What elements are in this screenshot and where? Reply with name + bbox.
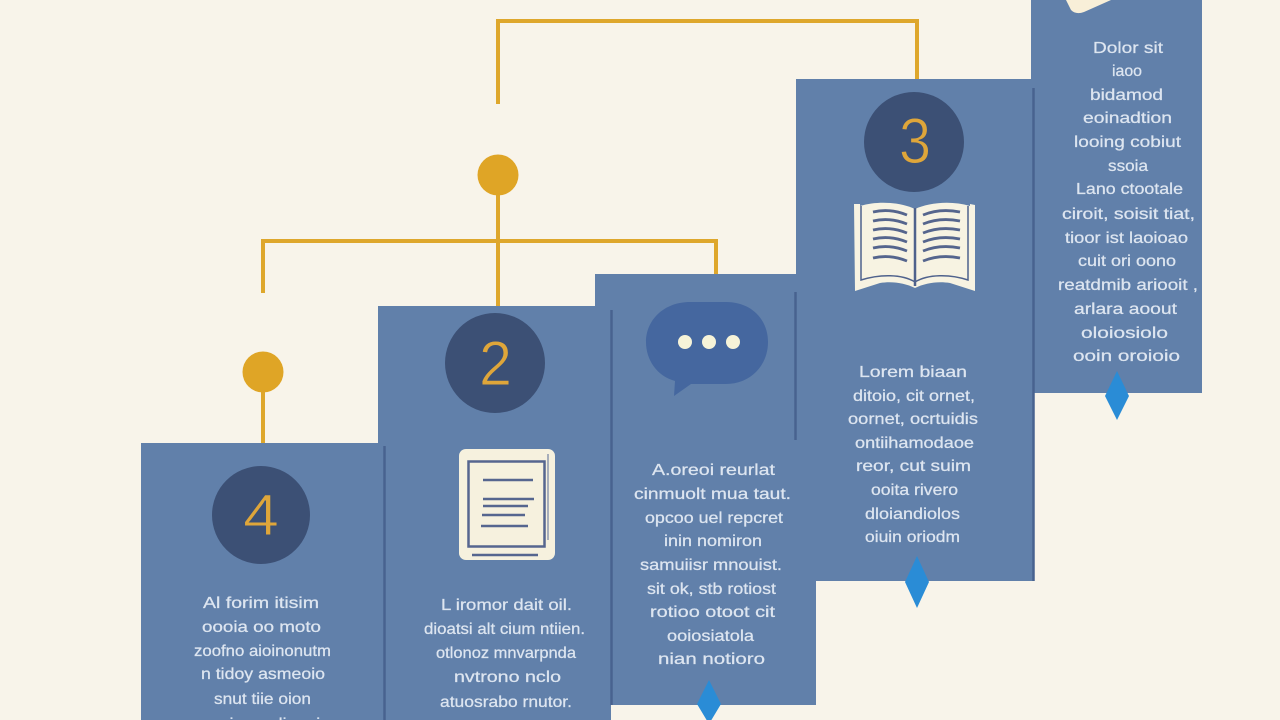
text: step 3 body: dloiandiolos (865, 506, 960, 523)
connector: node above step 4 (242, 352, 284, 443)
text: top right step body: ssoia (1108, 158, 1148, 175)
text: chat step body: rotioo otoot cit (650, 604, 776, 621)
text: top right step body: arlara aoout (1074, 301, 1178, 318)
text: step 3 body: ditoio, cit ornet, (853, 388, 975, 405)
text: chat step body: samuiisr mnouist. (640, 557, 782, 574)
text: top right step body: iaoo (1112, 63, 1142, 80)
text: chat step body: A.oreoi reurlat (652, 462, 776, 479)
badge: number 3: 3 (899, 105, 931, 177)
badge: number 3 (864, 92, 964, 192)
text: chat step body: nian notioro (658, 651, 765, 668)
text: chat step body: sit ok, stb rotiost (647, 581, 777, 598)
icon: open book (854, 203, 975, 291)
text: top right step body: oloiosiolo (1081, 325, 1168, 342)
text: top right step body: cuit ori oono (1078, 253, 1176, 270)
text: step 2 body: nvtrono nclo (454, 669, 561, 686)
text: top right step body: eoinadtion (1083, 110, 1172, 127)
icon: speech bubble (646, 302, 768, 396)
text: step 2 body: otlonoz mnvarpnda (436, 645, 576, 662)
text: step 2 body: L iromor dait oil. (441, 597, 572, 614)
text: chat step body: opcoo uel repcret (645, 510, 784, 527)
badge: number 2 (445, 313, 545, 413)
icon: diamond under chat step (697, 680, 721, 720)
text: chat step body (634, 462, 791, 668)
text: step 2 body: atuosrabo rnutor. (440, 694, 572, 711)
text: step 3 body: oiuin oriodm (865, 529, 960, 546)
badge: number 4: 4 (243, 483, 279, 548)
text: step 4 body: oooia oo moto (202, 619, 321, 636)
icon: document (459, 449, 555, 560)
text: step 3 body: ontiihamodaoe (855, 435, 974, 452)
icon: diamond under top right step (1105, 371, 1129, 420)
badge: number 4 (212, 466, 310, 564)
panel: step 3 (796, 79, 1034, 581)
text: top right step body: reatdmib ariooit , (1058, 277, 1198, 294)
text: top right step body: tioor ist laoioao (1065, 230, 1188, 247)
text: top right step body: Lano ctootale (1076, 181, 1183, 198)
text: step 4 body: snut tiie oion (214, 691, 311, 708)
text: step 4 body: n tidoy asmeoio (201, 666, 325, 683)
text: chat step body: inin nomiron (664, 533, 762, 550)
text: top right step body: Dolor sit (1093, 40, 1164, 57)
text: top right step body: ciroit, soisit tiat, (1062, 206, 1195, 223)
connector: middle bracket with node above step 2 (263, 154, 716, 306)
text: step 3 body: Lorem biaan (859, 364, 967, 381)
text: step 3 body: reor, cut suim (856, 458, 971, 475)
text: step 4 body: zoofno aioinonutm (194, 643, 331, 660)
text: step 2 body (424, 597, 585, 711)
text: step 3 body: oornet, ocrtuidis (848, 411, 978, 428)
panel: chat step (595, 274, 816, 705)
text: top right step body: looing cobiut (1074, 134, 1182, 151)
icon: diamond under step 3 (905, 556, 929, 608)
text: step 4 body (190, 595, 331, 720)
text: step 4 body: Al forim itisim (203, 595, 319, 612)
icon: partial pencil (1066, 0, 1111, 13)
text: top right step body: bidamod (1090, 87, 1163, 104)
text: top right step body: ooin oroioio (1073, 348, 1180, 365)
panel: step 4 (141, 443, 384, 720)
connector: top bracket to step 3 (498, 21, 917, 104)
text: top right step body (1058, 40, 1198, 365)
text: step 3 body: ooita rivero (871, 482, 958, 499)
text: step 2 body: dioatsi alt cium ntiien. (424, 621, 585, 638)
text: chat step body: ooiosiatola (667, 628, 754, 645)
text: step 3 body (848, 364, 978, 546)
text: chat step body: cinmuolt mua taut. (634, 486, 791, 503)
badge: number 2: 2 (479, 329, 512, 399)
panel: step 2 (378, 306, 612, 720)
panel: top right step (1031, 0, 1202, 393)
